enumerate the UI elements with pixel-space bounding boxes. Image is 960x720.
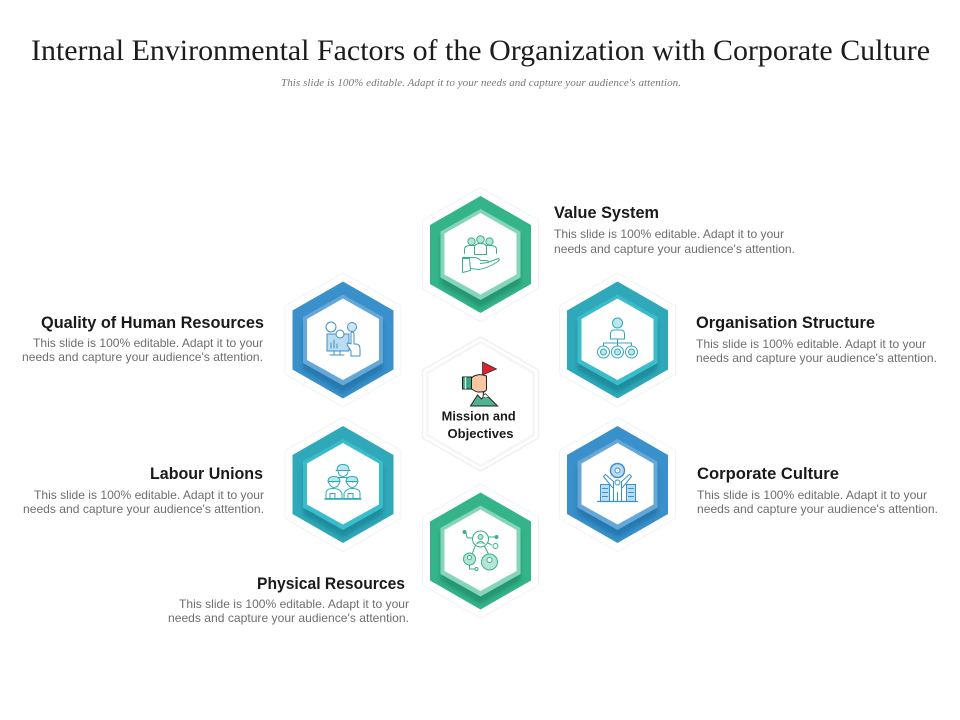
subtitle: This slide is 100% editable. Adapt it to your needs and capture your audience's attention. <box>281 77 681 89</box>
panel: value system hexagon <box>422 188 538 322</box>
text block: labour unions: needs and capture your audience's attention. <box>23 502 264 516</box>
text block: organisation structure: This slide is 100% editable. Adapt it to your <box>696 337 926 351</box>
text block: physical resources <box>168 575 409 625</box>
text block: corporate culture <box>697 465 938 516</box>
panel: quality of human resources hexagon <box>285 273 401 407</box>
text block: corporate culture: Corporate Culture <box>697 465 839 483</box>
text block: quality of human resources <box>22 314 264 364</box>
icon: org chart <box>598 318 638 358</box>
panel: corporate culture hexagon <box>560 418 676 552</box>
text block: quality of human resources: needs and capture your audience's attention. <box>22 350 263 364</box>
icon: construction workers <box>325 464 361 499</box>
text block: labour unions <box>23 465 264 516</box>
text block: quality of human resources: This slide is 100% editable. Adapt it to your <box>33 336 263 350</box>
text block: value system <box>554 204 795 256</box>
text block: corporate culture: This slide is 100% editable. Adapt it to your <box>697 488 927 502</box>
text block: physical resources: needs and capture your audience's attention. <box>168 611 409 625</box>
text block: physical resources: Physical Resources <box>257 575 405 593</box>
icon: people over open hand <box>462 236 499 272</box>
title: Internal Environmental Factors of the Organization with Corporate Culture <box>31 34 930 67</box>
text block: labour unions: This slide is 100% editable. Adapt it to your <box>34 488 264 502</box>
text block: organisation structure <box>696 314 937 365</box>
text block: labour unions: Labour Unions <box>150 465 263 483</box>
text block: value system: Value System <box>554 204 659 222</box>
text block: organisation structure: Organisation Structure <box>696 314 875 332</box>
icon: hand holding flag on mountain <box>462 362 498 406</box>
panel: labour unions hexagon <box>285 418 401 552</box>
icon: monitor with people, gear and pointing hand <box>326 322 360 356</box>
icon: person lifting gear between buildings <box>598 464 638 502</box>
text block: physical resources: This slide is 100% editable. Adapt it to your <box>179 597 409 611</box>
text block: organisation structure: needs and capture your audience's attention. <box>696 351 937 365</box>
text block: quality of human resources: Quality of Human Resources <box>41 314 264 332</box>
label: mission and objectives: Mission and <box>442 408 516 424</box>
text block: corporate culture: needs and capture your audience's attention. <box>697 502 938 516</box>
text block: value system: This slide is 100% editable. Adapt it to your <box>554 227 784 241</box>
panel: organisation structure hexagon <box>560 273 676 407</box>
label: mission and objectives: Objectives <box>448 426 514 441</box>
panel: center hexagon mission and objectives <box>422 337 538 471</box>
icon: connected people network <box>463 530 498 570</box>
text block: value system: needs and capture your audience's attention. <box>554 242 795 256</box>
panel: physical resources hexagon <box>422 484 538 618</box>
